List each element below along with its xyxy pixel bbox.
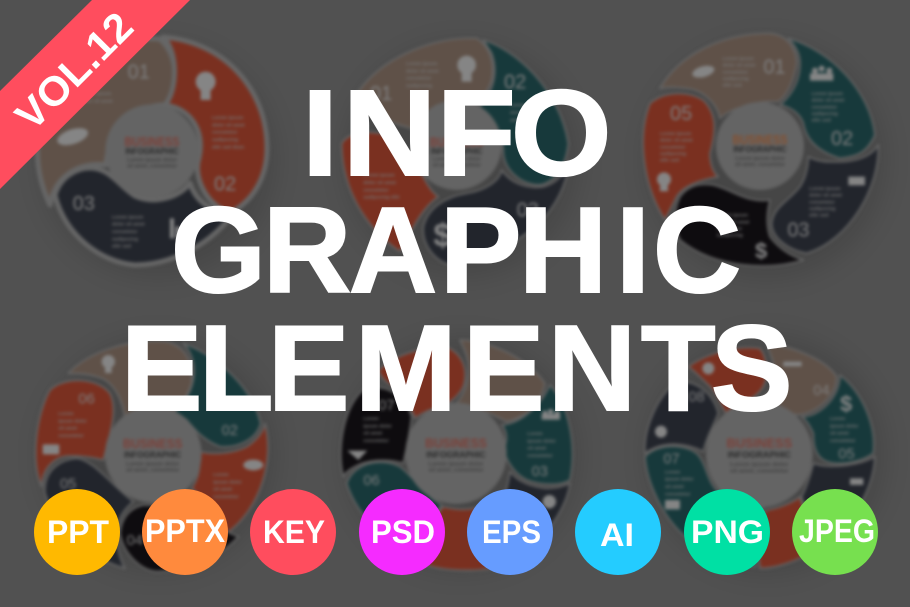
numbers and notes: Lorem ipsum — [660, 131, 691, 137]
numbers and notes: dolor sit amet — [717, 219, 750, 225]
numbers and notes: Lorem ipsum — [212, 115, 243, 121]
numbers and notes: consetetur — [406, 76, 432, 82]
segment 06 red — [36, 380, 113, 487]
segment 01 brown — [660, 33, 797, 118]
numbers and notes: consetetur — [212, 130, 238, 136]
segment 05 red — [643, 93, 718, 220]
icons — [657, 64, 865, 263]
badge: PPTX — [142, 489, 228, 575]
segment 03 teal — [502, 385, 572, 484]
numbers and notes: 05 — [60, 476, 76, 492]
numbers and notes: Lorem ipsum — [510, 103, 541, 109]
icons — [43, 355, 263, 470]
segment 06 teal — [347, 462, 442, 563]
numbers and notes: consetetur — [363, 187, 389, 193]
numbers and notes — [660, 56, 853, 242]
panel: donut bottom right — [645, 343, 875, 568]
numbers and notes: Lorem — [363, 416, 379, 422]
numbers and notes: 07 — [378, 398, 395, 414]
numbers and notes: dolor sit amet — [723, 63, 756, 69]
numbers and notes: Lorem ipsum — [363, 173, 395, 179]
badge: AI — [575, 489, 661, 575]
numbers and notes: dolor sit amet — [809, 193, 842, 199]
numbers and notes: consetetur — [363, 438, 389, 444]
numbers and notes: 06 — [363, 473, 380, 489]
segment 04 red — [342, 132, 438, 252]
numbers and notes: consetetur — [723, 69, 748, 75]
numbers and notes: sit amet — [213, 487, 232, 493]
numbers and notes: dolor sit amet — [812, 98, 845, 104]
segment 02 teal — [780, 38, 875, 158]
numbers and notes: 02 — [504, 71, 526, 93]
centre label: Lorem ipsum dolor — [735, 156, 785, 162]
segment 04 navy — [802, 457, 875, 537]
numbers and notes: 05 — [838, 446, 855, 462]
title line: INFO: INFO — [302, 64, 612, 201]
panel: donut top left — [37, 37, 267, 265]
centre label: sit amet, consetetur — [735, 162, 785, 168]
numbers and notes: consetetur — [213, 494, 239, 500]
title — [121, 64, 792, 436]
ribbon: VOL.12 — [0, 0, 190, 189]
centre label: Lorem ipsum dolor — [428, 461, 483, 467]
numbers and notes: sadipscing — [660, 151, 686, 157]
badge: PSD — [359, 489, 445, 575]
segment 02 teal — [473, 40, 568, 185]
badge: AI: AI — [600, 517, 634, 553]
segment 04 black — [675, 184, 803, 266]
title line: ELEMENTS: ELEMENTS — [121, 300, 792, 436]
centre label — [105, 406, 202, 503]
icon: bulb and dollar — [433, 56, 476, 255]
segment 05 red — [426, 503, 497, 570]
numbers and notes: sit amet — [830, 431, 849, 437]
badge: PPT: PPT — [47, 514, 109, 550]
segment 04 black — [120, 492, 238, 572]
centre label: BUSINESS — [726, 436, 792, 450]
panel: donut top middle — [342, 38, 570, 265]
numbers and notes: Lorem ipsum — [812, 91, 843, 97]
numbers and notes: sadipscing — [212, 137, 238, 143]
numbers and notes — [363, 398, 556, 489]
numbers and notes: Lorem — [213, 472, 229, 478]
numbers and notes: consetetur — [812, 104, 837, 110]
segment 03 navy — [423, 160, 570, 265]
numbers and notes: Lorem — [527, 431, 543, 437]
icons — [55, 72, 216, 238]
numbers and notes: 02 — [222, 423, 238, 439]
panel: donut bottom left — [36, 341, 268, 572]
numbers and notes: Lorem — [665, 469, 680, 475]
numbers and notes: ipsum dolor — [213, 479, 242, 485]
segment 01 red — [688, 348, 767, 413]
numbers and notes: dolor sit amet — [660, 138, 693, 144]
numbers and notes — [73, 61, 245, 250]
numbers and notes: consetetur — [527, 453, 553, 459]
numbers and notes: 02 — [214, 174, 236, 196]
numbers and notes: sadipscing — [112, 236, 138, 242]
numbers and notes: 01 — [128, 61, 150, 83]
numbers and notes: Lorem — [830, 416, 845, 422]
centre label: INFOGRAPHIC — [431, 146, 482, 156]
badge: PPTX: PPTX — [145, 513, 226, 549]
numbers and notes: sadipscing — [406, 83, 432, 89]
format badges — [34, 489, 878, 575]
numbers and notes: sit amet — [665, 484, 684, 490]
numbers and notes: 03 — [787, 220, 810, 242]
numbers and notes: elitr sed — [723, 83, 742, 89]
numbers and notes — [663, 383, 859, 497]
centre label: BUSINESS — [732, 133, 787, 147]
segment 01 brown — [68, 341, 192, 420]
centre label — [706, 401, 813, 508]
numbers and notes — [363, 61, 542, 222]
icons — [347, 409, 560, 508]
numbers and notes: 08 — [688, 390, 705, 406]
centre label: BUSINESS — [123, 437, 182, 451]
numbers and notes: 04 — [127, 533, 143, 549]
centre label — [105, 104, 199, 198]
centre label: BUSINESS — [425, 436, 487, 450]
numbers and notes: ipsum dolor — [363, 423, 392, 429]
icons: $ — [840, 392, 852, 417]
segment 01 brown — [358, 38, 493, 133]
ribbon label: VOL.12 — [6, 3, 142, 139]
numbers and notes: elitr sed — [112, 244, 131, 250]
numbers and notes: dolor sit — [510, 110, 530, 116]
segment 07 navy — [645, 382, 718, 453]
panel: donut top right — [643, 33, 878, 266]
numbers and notes: consetetur — [112, 229, 138, 235]
numbers and notes: sit amet — [58, 426, 78, 432]
numbers and notes: sit amet — [527, 446, 546, 452]
centre label: BUSINESS — [124, 135, 179, 149]
numbers and notes: dolor sit amet — [80, 98, 113, 104]
numbers and notes: elitr sed — [660, 158, 679, 164]
numbers and notes: consetetur — [717, 226, 742, 232]
segment 03 navy — [55, 168, 232, 265]
badge: JPEG — [792, 489, 878, 575]
numbers and notes: sadipscing elitr — [363, 195, 400, 201]
badge: PNG — [684, 489, 770, 575]
centre label: INFOGRAPHIC — [125, 146, 179, 156]
segment 02 brown — [750, 343, 837, 415]
segment 06 teal — [645, 446, 763, 567]
numbers and notes: ipsum dolor — [830, 423, 859, 429]
numbers and notes: ipsum dolor — [665, 477, 694, 483]
numbers and notes: Lorem ipsum — [112, 214, 143, 220]
numbers and notes: Lorem ipsum — [809, 186, 841, 192]
badge: PNG: PNG — [691, 514, 764, 550]
ribbon band — [0, 0, 190, 189]
centre label: sit amet, consetetur — [428, 467, 483, 473]
segment 03 navy — [772, 145, 878, 253]
numbers and notes: Lorem ipsum — [406, 61, 437, 67]
badge: PPT — [34, 489, 120, 575]
centre label: Lorem ipsum dolor — [730, 462, 788, 468]
panel: donut bottom middle — [341, 340, 572, 570]
icon: bulb and dollar: $ — [433, 218, 452, 255]
numbers and notes: 03 — [517, 200, 539, 222]
icons: $ — [755, 238, 767, 263]
numbers and notes: elitr sed — [812, 118, 831, 124]
badge: KEY: KEY — [263, 514, 325, 550]
centre label: sit amet, consetetur — [730, 469, 788, 475]
numbers and notes: 01 — [370, 83, 392, 105]
centre label: sit amet, consetetur — [127, 163, 177, 169]
segment 03 teal — [802, 375, 874, 463]
centre label — [716, 102, 804, 190]
numbers and notes: consetetur — [665, 491, 691, 497]
centre label: Lorem ipsum dolor — [432, 157, 481, 163]
segment 01 brown — [37, 39, 175, 205]
centre label: Lorem ipsum dolor — [127, 157, 177, 163]
numbers and notes: Lorem ipsum — [723, 56, 754, 62]
numbers and notes: Lorem ipsum — [80, 91, 111, 97]
numbers and notes: sit amet — [363, 431, 383, 437]
numbers and notes: 04 — [813, 383, 830, 399]
centre label: BUSINESS — [430, 136, 483, 150]
centre label: sit amet, consetetur — [432, 163, 481, 169]
numbers and notes: amet — [510, 117, 522, 123]
numbers and notes: dolor sit amet — [112, 222, 145, 228]
numbers and notes: dolor sit amet — [212, 122, 245, 128]
numbers and notes: sadipscing — [717, 233, 743, 239]
centre label: INFOGRAPHIC — [728, 449, 791, 459]
centre label — [412, 100, 502, 190]
segment 05 navy — [45, 458, 133, 568]
badge: EPS — [467, 489, 553, 575]
centre label: INFOGRAPHIC — [426, 449, 486, 459]
numbers and notes: dolor sit amet — [406, 68, 439, 74]
numbers and notes: Lorem ipsum — [717, 213, 748, 219]
centre label: INFOGRAPHIC — [124, 449, 181, 459]
numbers and notes: sadipscing — [809, 206, 835, 212]
numbers and notes: sadipscing — [812, 111, 838, 117]
numbers and notes: elitr sed diam — [212, 144, 245, 150]
numbers and notes: 01 — [763, 56, 786, 78]
badge: KEY — [250, 489, 336, 575]
numbers and notes: 02 — [831, 128, 853, 150]
numbers and notes: consetetur — [58, 433, 84, 439]
numbers and notes: consetetur — [830, 438, 856, 444]
segment 03 red — [192, 423, 268, 533]
centre label: INFOGRAPHIC — [733, 144, 787, 154]
numbers and notes: elitr sed — [809, 213, 828, 219]
numbers and notes: Lorem — [58, 411, 74, 417]
numbers and notes: 03 — [73, 193, 95, 215]
numbers and notes: 05 — [670, 103, 692, 125]
segment 02 teal — [172, 343, 261, 447]
segment 07 black — [341, 388, 412, 477]
numbers and notes: ipsum dolor — [527, 438, 556, 444]
segment 02 brown — [453, 340, 545, 422]
numbers and notes: 07 — [663, 451, 680, 467]
segment 01 red — [378, 348, 465, 418]
numbers and notes: sadipscing — [723, 76, 749, 82]
centre label: Lorem ipsum dolor — [126, 461, 179, 467]
numbers and notes — [58, 391, 242, 549]
centre label — [405, 403, 507, 504]
centre label: sit amet, consetetur — [126, 467, 179, 473]
numbers and notes: 06 — [78, 391, 95, 407]
numbers and notes: consetetur — [809, 199, 835, 205]
numbers and notes: dolor sit amet — [363, 180, 396, 186]
title line: GRAPHIC: GRAPHIC — [171, 182, 741, 318]
segment 04 navy — [490, 472, 570, 565]
numbers and notes: ipsum dolor — [58, 418, 87, 424]
badge: PSD: PSD — [371, 514, 435, 550]
badge: EPS: EPS — [482, 514, 541, 550]
segment 02 red — [163, 37, 267, 213]
numbers and notes: 03 — [532, 464, 548, 480]
segment 05 red — [759, 497, 830, 568]
icons — [655, 362, 863, 509]
badge: JPEG: JPEG — [799, 513, 875, 549]
numbers and notes: consetetur — [660, 144, 686, 150]
